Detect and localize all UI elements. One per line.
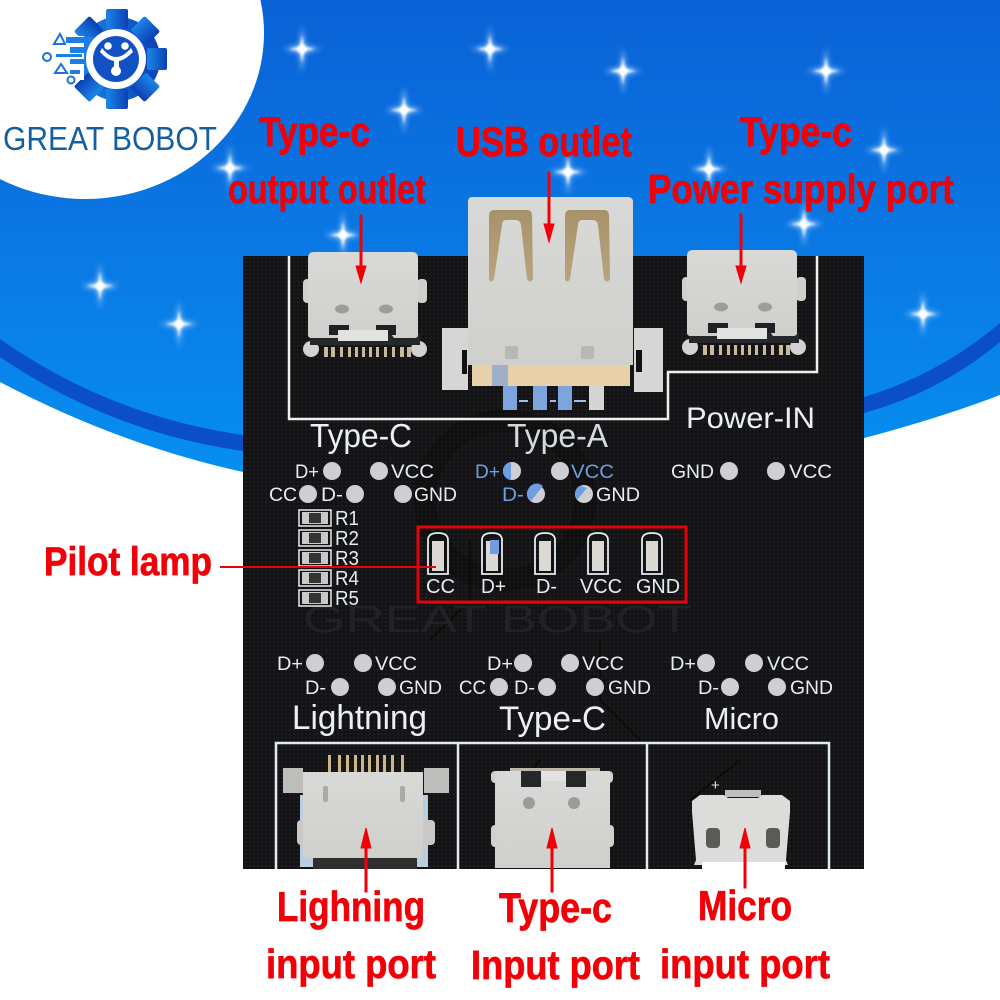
callout: USB outlet: USB outlet [456, 118, 632, 165]
pilot lamp LEDs: D- [536, 576, 557, 598]
background: blue sky panel [0, 0, 1000, 520]
callout: Micro input port: Micro [698, 882, 792, 929]
arrow: USB outlet [544, 172, 554, 242]
callout: Micro input port: input port [660, 941, 830, 987]
arrow: Lightning input [361, 828, 371, 892]
resistors R1 to R5 [299, 508, 359, 610]
pads: Lightning input: D- [305, 677, 326, 699]
callout: Lightning input port: input port [266, 941, 436, 987]
pads: Lightning input [277, 653, 442, 699]
section label: Type-A: Type-A [507, 417, 608, 454]
callout: Type-c input port: Type-c [499, 884, 612, 931]
pads: Type-C input: CC [459, 677, 486, 699]
callout: Type-c output outlet [228, 108, 426, 212]
pilot lamp LEDs: VCC [580, 576, 622, 598]
callout: Pilot lamp: Pilot lamp [44, 540, 212, 584]
section label: Power-IN: Power-IN [686, 402, 815, 435]
pads: Micro input: VCC [767, 653, 809, 675]
callout: Type-c power supply port: Type-c [740, 108, 852, 155]
callout: Lightning input port [266, 883, 436, 987]
callout: Type-c output outlet: Type-c [259, 108, 370, 155]
callout: Micro input port [660, 882, 830, 987]
pads: Power-IN: GND [671, 461, 714, 483]
section label: Type-C: Type-C [310, 417, 412, 454]
resistors R1 to R5: R5 [335, 588, 359, 610]
pads: Type-C input: D- [514, 677, 535, 699]
pads: Lightning input: GND [399, 677, 442, 699]
pads: Type-A output: D- [502, 484, 524, 506]
resistors R1 to R5: R3 [335, 548, 359, 570]
section label: Micro: Micro [704, 701, 779, 736]
pads: Type-C input: D+ [487, 653, 513, 675]
resistors R1 to R5: R1 [335, 508, 359, 530]
pilot lamp LEDs: CC [426, 576, 455, 598]
arrow: Type-c power [736, 214, 746, 283]
callout: Lightning input port: Lighning [277, 883, 425, 930]
logo panel: white ellipse [0, 0, 264, 199]
pads: Micro input: D- [698, 677, 719, 699]
pilot lamp highlight box [418, 527, 686, 602]
pads: Micro input [670, 653, 833, 699]
pads: Type-C output: CC [269, 484, 297, 506]
connector: Micro input [692, 777, 790, 870]
pads: Power-IN [671, 461, 832, 483]
pads: Type-A output: GND [596, 484, 640, 506]
pilot lamp LEDs [426, 533, 680, 598]
pads: Type-C output: D+ [295, 461, 319, 483]
pads: Type-C output: GND [414, 484, 457, 506]
background: white lower area [0, 382, 1000, 1000]
callout: Type-c power supply port [648, 108, 954, 212]
resistors R1 to R5: R2 [335, 528, 359, 550]
panel: black PCB board [243, 256, 864, 869]
pads: Lightning input: VCC [375, 653, 417, 675]
connector: Micro input: + [711, 777, 720, 794]
arrow: Type-C input [547, 828, 557, 892]
pads: Type-C input: VCC [582, 653, 624, 675]
connector: USB Type-A outlet [442, 197, 663, 410]
pads: Lightning input: D+ [277, 653, 303, 675]
callout: Type-c input port [471, 884, 640, 988]
callout: Type-c input port: Input port [471, 942, 640, 988]
section label: Type-C input: Type-C [499, 700, 606, 738]
callout: Type-c power supply port: Power supply port [648, 166, 954, 212]
section label: Lightning: Lightning [292, 699, 427, 737]
pads: Micro input: D+ [670, 653, 696, 675]
connector: Type-C output [303, 252, 427, 357]
connector: Type-C input [491, 768, 614, 868]
logo: Great Bobot gear mark [43, 9, 167, 109]
connector: Type-C power input [682, 250, 806, 355]
pads: Type-A output: D+ [475, 461, 500, 483]
background: dark blue curved band [0, 323, 1000, 471]
pads: Type-A output [475, 461, 640, 506]
pads: Type-C output [269, 461, 457, 506]
resistors R1 to R5: R4 [335, 568, 359, 590]
bottom silkscreen frame [276, 743, 829, 869]
pads: Type-A output: VCC [571, 461, 614, 483]
top silkscreen frame [289, 256, 817, 419]
pads: Type-C output: VCC [391, 461, 434, 483]
arrow: Type-c output [356, 215, 366, 283]
pads: Type-C input: GND [608, 677, 651, 699]
pads: Micro input: GND [790, 677, 833, 699]
arrow: Micro input [740, 828, 750, 888]
pads: Type-C output: D- [321, 484, 343, 506]
pads: Power-IN: VCC [789, 461, 832, 483]
callout: Type-c output outlet: output outlet [228, 166, 426, 212]
pilot lamp leader line [220, 566, 436, 568]
watermark on board: GREAT BOBOT [303, 599, 691, 641]
pilot lamp LEDs: D+ [481, 576, 506, 598]
logo wordmark: GREAT BOBOT [3, 120, 217, 157]
sparkle stars [81, 25, 942, 348]
pilot lamp LEDs: GND [636, 576, 680, 598]
connector: Lightning input [283, 755, 449, 869]
pads: Type-C input [459, 653, 651, 699]
